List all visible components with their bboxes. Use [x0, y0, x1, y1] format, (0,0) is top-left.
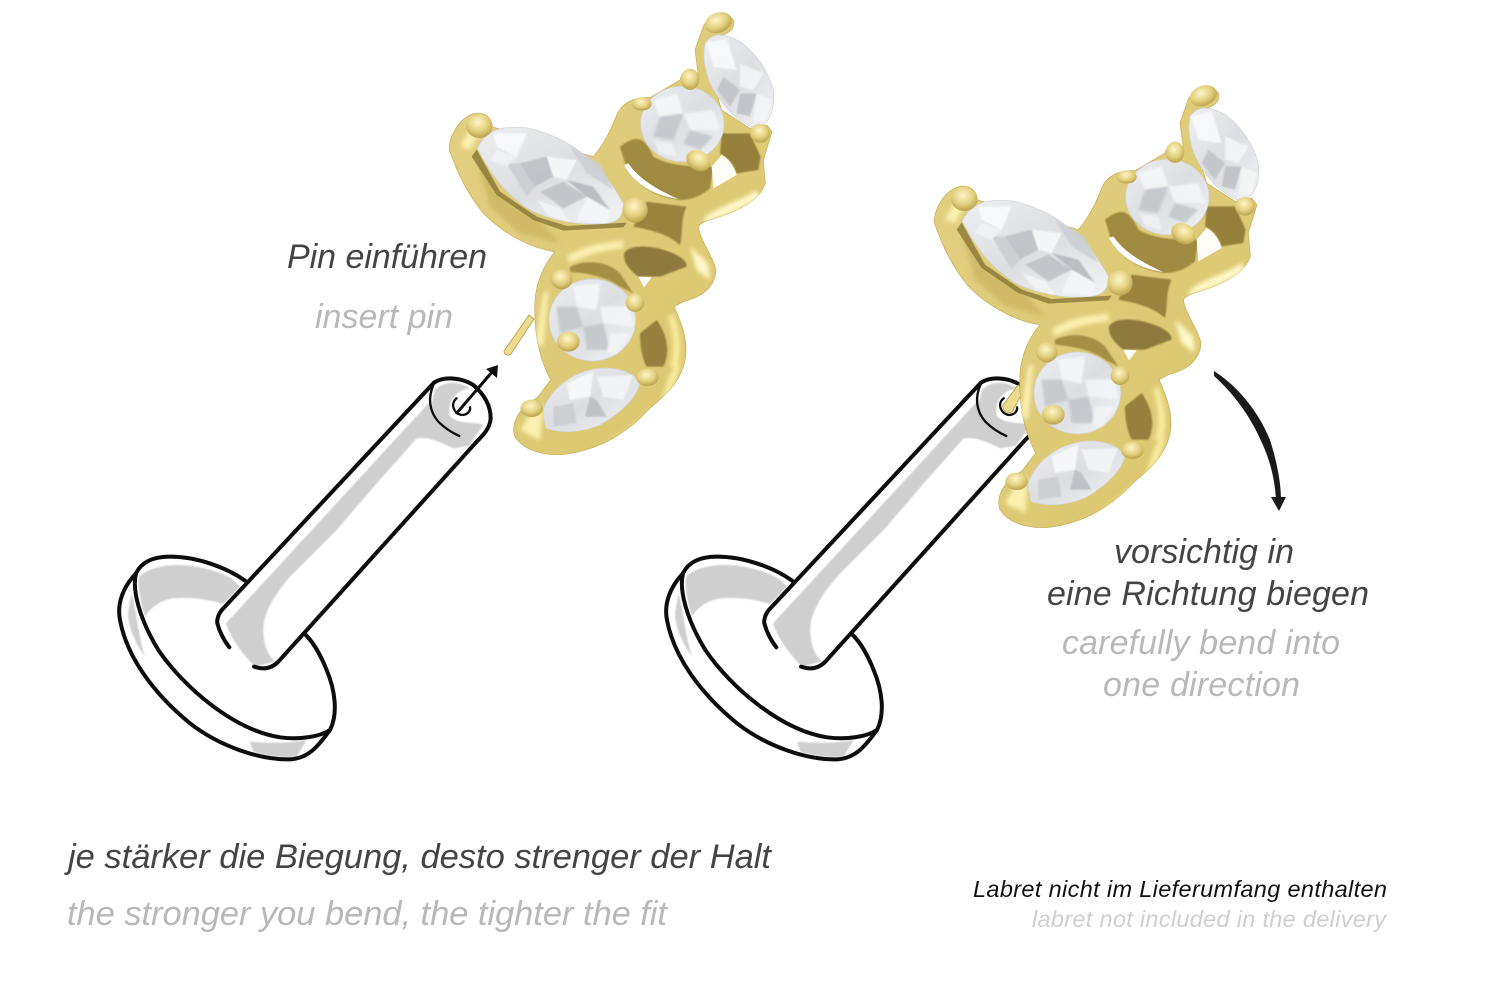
text: bend note: [64, 838, 772, 933]
labret: left: [119, 378, 491, 759]
label: bend carefully: one direction: [1103, 666, 1300, 704]
arrow: insert pin: [456, 365, 498, 414]
arrow: bend direction: [1214, 371, 1286, 511]
icon: gold pin: [504, 315, 534, 355]
text: bend note: the stronger you bend, the tighter the fit: [67, 895, 668, 933]
text: delivery note: Labret nicht im Lieferumfang enthalten: [973, 876, 1387, 902]
icon: gold pin inserted: [1003, 385, 1024, 413]
label: insert pin: Pin einführen: [287, 238, 487, 276]
label: bend carefully: vorsichtig in: [1114, 533, 1294, 571]
label: insert pin: [287, 238, 487, 336]
jewel: right gold piece: [934, 81, 1259, 528]
label: bend carefully: eine Richtung biegen: [1047, 575, 1369, 613]
label: insert pin: insert pin: [315, 298, 453, 336]
label: bend carefully: [1047, 533, 1369, 704]
text: delivery note: [973, 876, 1387, 932]
text: delivery note: labret not included in the delivery: [1032, 906, 1387, 932]
label: bend carefully: carefully bend into: [1062, 624, 1340, 662]
jewel: left gold piece: [449, 8, 774, 455]
labret: right: [666, 378, 1038, 759]
text: bend note: je stärker die Biegung, desto strenger der Halt: [64, 838, 772, 876]
